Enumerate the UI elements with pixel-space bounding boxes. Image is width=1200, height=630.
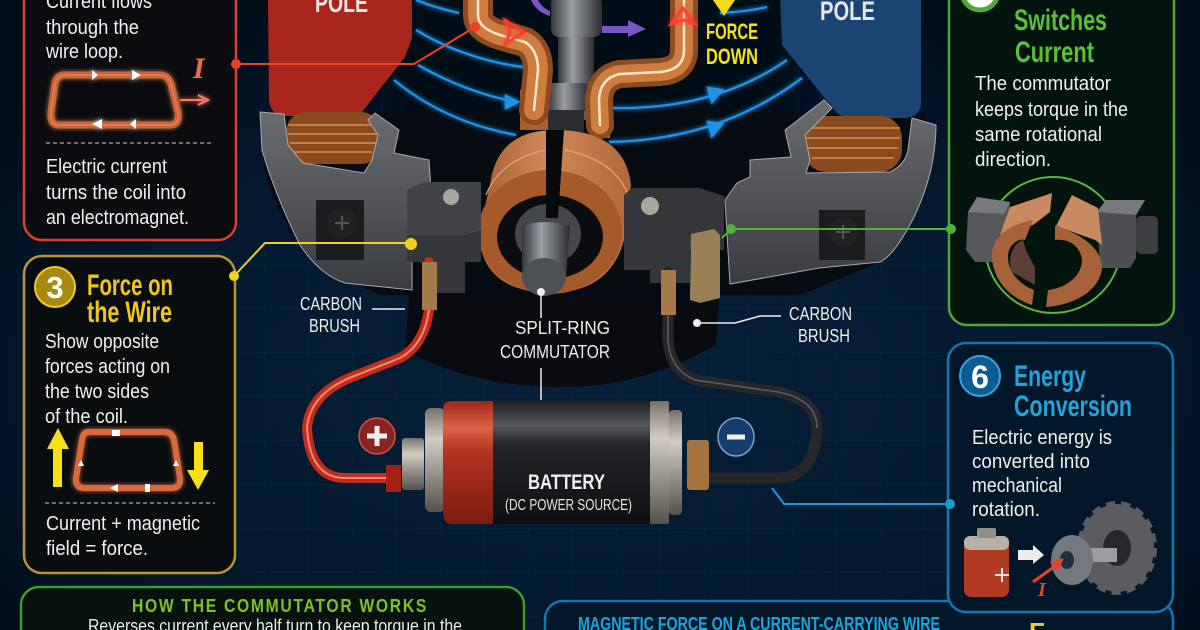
- battery: [386, 401, 709, 524]
- panel: magnetic force formula (blue): [545, 601, 1173, 630]
- field coil left: [286, 112, 381, 164]
- force down label: DOWN: [706, 44, 758, 69]
- icon: number 3 badge: [35, 267, 75, 307]
- connector: yellow leader: [230, 239, 416, 280]
- panel: switches current (green): [949, 0, 1174, 325]
- label: right carbon brush: BRUSH: [798, 325, 850, 346]
- panel: current flows (red): an electromagnet.: [46, 206, 189, 229]
- negative terminal badge: [718, 418, 754, 456]
- panel: current flows (red): turns the coil into: [46, 181, 186, 204]
- left bracket: [260, 112, 431, 290]
- label: right carbon brush: [693, 303, 852, 346]
- panel: current flows (red): Electric current: [46, 155, 167, 178]
- panel: force on the wire (yellow): the two sides: [45, 380, 149, 403]
- magnetic field lines: [394, 0, 802, 142]
- panel: switches current (green): The commutator: [975, 72, 1111, 95]
- panel: force on the wire (yellow): Show opposite: [45, 330, 159, 353]
- label: right carbon brush: CARBON: [789, 303, 852, 324]
- connector: green leader: [722, 225, 955, 238]
- battery: (DC POWER SOURCE): [505, 497, 632, 514]
- right pole: blue: [780, 0, 921, 118]
- field coil right: [804, 116, 902, 172]
- panel: force on the wire (yellow): [24, 256, 235, 573]
- panel: current flows (red): [24, 0, 236, 240]
- label: split-ring commutator: SPLIT-RING: [515, 317, 610, 338]
- icon: number 6 badge: [960, 356, 1000, 396]
- armature coil wires: [478, 0, 684, 138]
- panel: energy conversion (blue): Electric energy is: [972, 426, 1112, 449]
- panel: energy conversion (blue): Conversion: [1014, 390, 1132, 423]
- panel: force on the wire (yellow): the Wire: [87, 296, 172, 329]
- label: left carbon brush: BRUSH: [309, 315, 360, 336]
- force down label: [706, 0, 758, 69]
- panel: current flows (red): wire loop.: [45, 40, 123, 63]
- panel: switches current (green): Switches: [1014, 4, 1107, 37]
- panel: energy conversion (blue): mechanical: [972, 474, 1062, 497]
- panel: switches current (green): direction.: [975, 148, 1051, 171]
- connector: blue leader: [772, 488, 954, 508]
- panel: how the commutator works (green): HOW THE COMMUTATOR WORKS: [132, 595, 428, 616]
- panel: current flows (red): through the: [46, 16, 139, 39]
- panel: how the commutator works (green): [21, 587, 524, 630]
- icon: glowing wire loop: [51, 70, 208, 129]
- panel: switches current (green): same rotational: [975, 123, 1102, 146]
- panel: current flows (red): I: [192, 52, 206, 85]
- positive wire: [307, 262, 437, 478]
- panel: switches current (green): Current: [1015, 36, 1094, 69]
- label: left carbon brush: CARBON: [300, 293, 362, 314]
- panel: energy conversion (blue): converted into: [972, 450, 1090, 473]
- label: split-ring commutator: [500, 288, 610, 400]
- icon: number 3 badge: 3: [46, 270, 64, 305]
- label: left carbon brush: [300, 293, 405, 336]
- negative wire: [661, 270, 817, 478]
- connector: red leader: [232, 23, 479, 68]
- label: split-ring commutator: COMMUTATOR: [500, 341, 610, 362]
- icon: coil with opposite force arrows: [47, 428, 209, 492]
- panel: force on the wire (yellow): field = force.: [46, 537, 148, 560]
- panel: energy conversion (blue): rotation.: [972, 498, 1040, 521]
- commutator: [478, 130, 631, 296]
- panel: force on the wire (yellow): Force on: [87, 269, 173, 302]
- panel: force on the wire (yellow): of the coil.: [45, 405, 128, 428]
- panel: energy conversion (blue): [948, 343, 1173, 612]
- current arrows on armature: [505, 8, 695, 44]
- right bracket: [725, 100, 936, 284]
- positive terminal badge: [359, 418, 395, 454]
- panel: force on the wire (yellow): forces acting on: [45, 355, 170, 378]
- icon: number 5 badge: [962, 0, 998, 10]
- panel: energy conversion (blue): Energy: [1014, 360, 1086, 393]
- motor housing: [260, 0, 936, 387]
- icon: number 6 badge: 6: [971, 359, 989, 395]
- icon: battery to gear: [964, 504, 1154, 601]
- right brush holder: [624, 188, 724, 303]
- panel: switches current (green): keeps torque in the: [975, 98, 1128, 121]
- rotation arrows: [531, 0, 646, 37]
- motor shaft: [548, 0, 602, 132]
- left brush holder: [407, 182, 481, 293]
- icon: split ring between brushes: [966, 177, 1158, 313]
- force down label: FORCE: [706, 19, 758, 44]
- icon: battery to gear: I: [1037, 579, 1047, 601]
- left pole: red: [268, 0, 412, 116]
- battery: BATTERY: [528, 471, 605, 494]
- panel: force on the wire (yellow): Current + magnetic: [46, 512, 200, 535]
